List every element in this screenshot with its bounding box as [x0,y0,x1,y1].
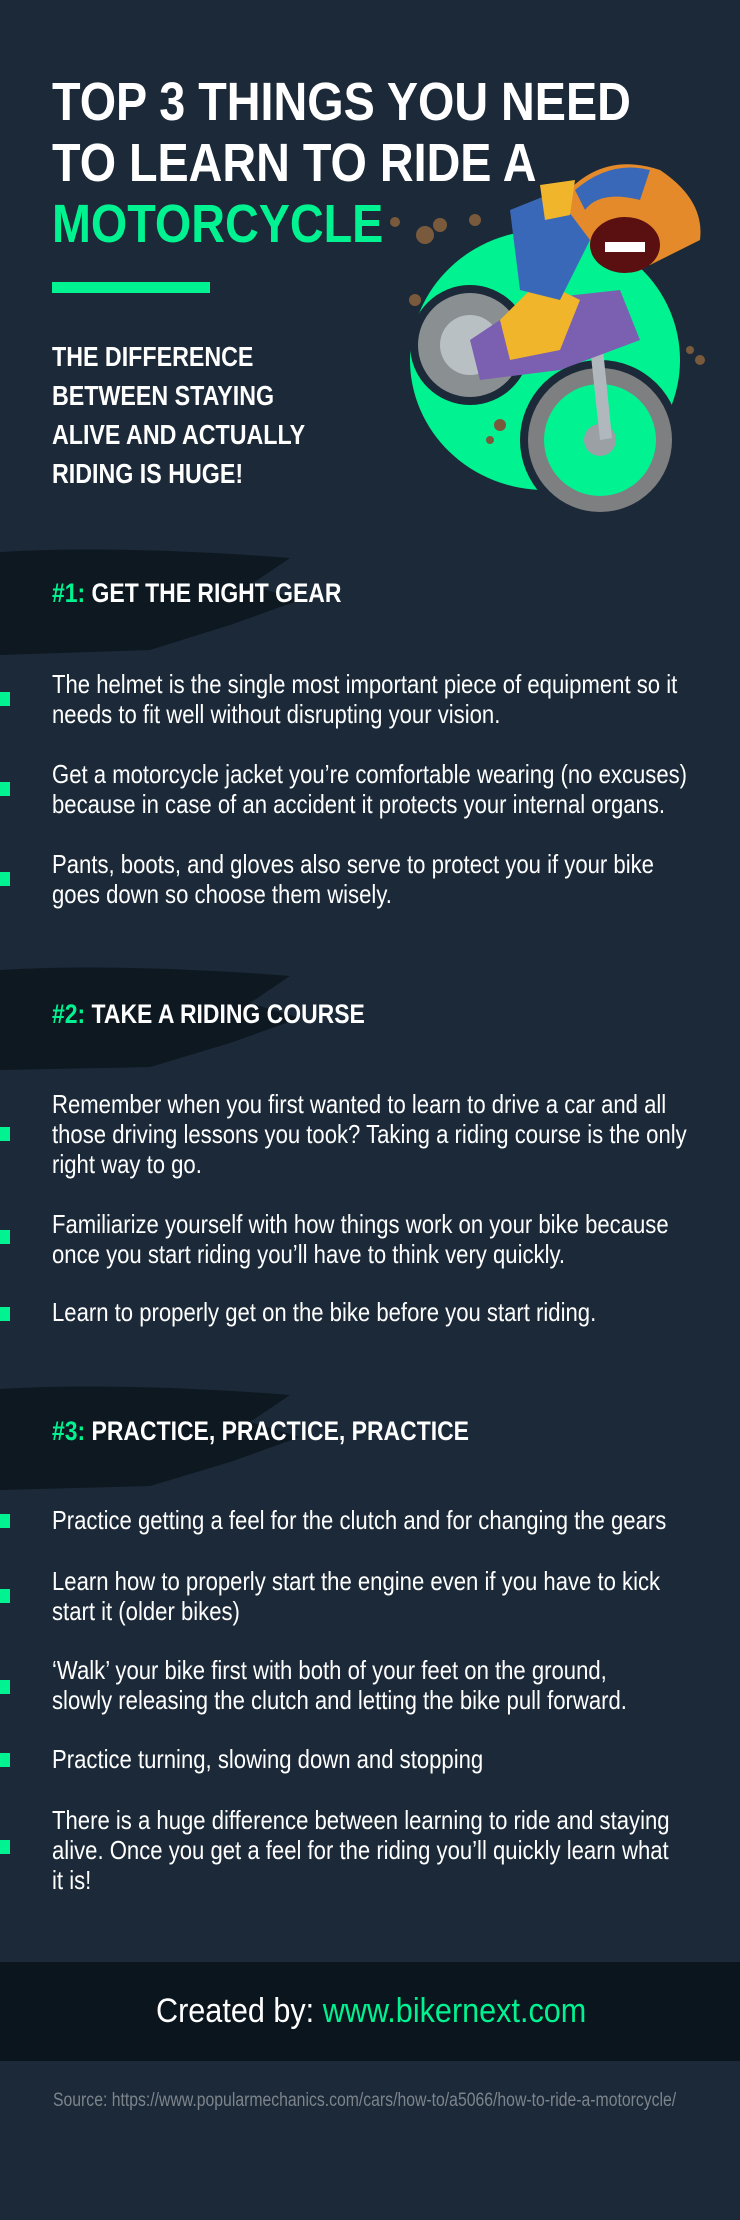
section 3 heading: #3: PRACTICE, PRACTICE, PRACTICE [52,1416,469,1446]
section 3 bullets [0,1505,670,1895]
illustration: motocross rider [390,164,705,512]
section 3 bullets: it is! [52,1865,91,1895]
title [52,72,631,254]
title: TO LEARN TO RIDE A [52,133,536,193]
section 3 bullets: Practice getting a feel for the clutch and for changing the gears [52,1505,666,1535]
section 1 bullets: Get a motorcycle jacket you’re comfortable wearing (no excuses) [52,759,687,789]
section 2 bullets [0,1089,687,1327]
subtitle: RIDING IS HUGE! [52,458,243,489]
section 1 bullets: The helmet is the single most important piece of equipment so it [52,669,677,699]
subtitle [52,341,305,489]
title: MOTORCYCLE [52,194,383,254]
section 2 bullets: those driving lessons you took? Taking a riding course is the only [52,1119,687,1149]
section 2 bullets: Learn to properly get on the bike before you start riding. [52,1297,596,1327]
subtitle: THE DIFFERENCE [52,341,253,372]
section 3 bullets: slowly releasing the clutch and letting the bike pull forward. [52,1685,627,1715]
section 1 bullets: goes down so choose them wisely. [52,879,392,909]
section 3 bullets: ‘Walk’ your bike first with both of your feet on the ground, [52,1655,607,1685]
section 3 bullets: alive. Once you get a feel for the riding you’ll quickly learn what [52,1835,669,1865]
section 3 bullets: There is a huge difference between learning to ride and staying [52,1805,670,1835]
subtitle: BETWEEN STAYING [52,380,274,411]
section 3 bullets: Learn how to properly start the engine even if you have to kick [52,1566,660,1596]
section 1 bullets: needs to fit well without disrupting your vision. [52,699,500,729]
footer band: credit [0,1962,740,2061]
section 3 bullets: Practice turning, slowing down and stopping [52,1744,483,1774]
section 2 bullets: right way to go. [52,1149,202,1179]
section 1 bullets [0,669,687,909]
title: TOP 3 THINGS YOU NEED [52,72,631,132]
section 2 bullets: once you start riding you’ll have to think very quickly. [52,1239,565,1269]
green underline bar [52,282,210,293]
source: Source: https://www.popularmechanics.com/cars/how-to/a5066/how-to-ride-a-motorcycle/ [53,2090,676,2111]
section 2 bullets: Familiarize yourself with how things work on your bike because [52,1209,669,1239]
section 3 bullets: start it (older bikes) [52,1596,240,1626]
section 1 bullets: Pants, boots, and gloves also serve to protect you if your bike [52,849,654,879]
footer band: credit: Created by: www.bikernext.com [156,1992,586,2030]
section 2 heading: #2: TAKE A RIDING COURSE [52,999,365,1029]
section 1 bullets: because in case of an accident it protects your internal organs. [52,789,665,819]
section 1 heading: #1: GET THE RIGHT GEAR [52,578,341,608]
subtitle: ALIVE AND ACTUALLY [52,419,305,450]
section 2 bullets: Remember when you first wanted to learn to drive a car and all [52,1089,666,1119]
